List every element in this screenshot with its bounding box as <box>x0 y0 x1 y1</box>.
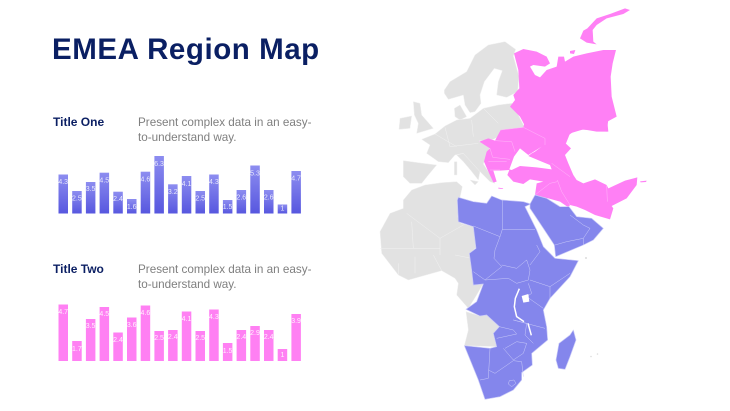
bar chart: title one: 2.6 <box>236 194 246 202</box>
bar chart: title one: 4.6 <box>141 176 150 184</box>
bar chart: title one: 4.3 <box>58 179 68 186</box>
map: grey West Africa <box>380 182 483 308</box>
text block: title one description: to-understand way. <box>138 131 237 144</box>
title: EMEA Region Map <box>52 33 320 66</box>
bar chart: title two <box>58 304 301 361</box>
bar chart: title two: 2.5 <box>195 335 205 342</box>
bar chart: title two: 4.1 <box>182 316 191 323</box>
text block: title two description <box>138 263 311 291</box>
map: pink Eastern Europe, Turkey and Middle East <box>479 120 647 219</box>
bar chart: title two: 2.5 <box>154 335 164 342</box>
text block: title two description: to-understand way. <box>138 278 237 291</box>
bar chart: title one: 3.2 <box>168 189 178 196</box>
bar chart: title one: 4.3 <box>209 179 219 186</box>
bar chart: title one: 2.4 <box>113 196 123 203</box>
bar chart: title two: 4.7 <box>58 309 68 316</box>
map: grey Europe <box>399 42 527 185</box>
map: small islands <box>585 257 598 357</box>
bar chart: title one: 4.7 <box>291 176 301 182</box>
map: Lake Victoria <box>522 294 529 303</box>
bar chart: title two: 1.5 <box>223 348 233 355</box>
heading: title two: Title Two <box>53 262 104 276</box>
bar chart: title two: 4.5 <box>99 311 109 318</box>
bar chart: title one: 1 <box>280 206 284 212</box>
bar chart: title one: 2.5 <box>195 196 205 202</box>
map: purple Africa and Arabia <box>457 195 603 399</box>
bar chart: title two: 1 <box>280 352 284 359</box>
bar chart: title one: 4.1 <box>182 181 191 188</box>
map: pink Russia <box>510 8 630 147</box>
map: Rift Valley lakes <box>514 289 531 335</box>
bar chart: title two: 3.5 <box>86 323 96 330</box>
map: Black Sea <box>509 147 552 170</box>
bar chart: title two: 2.4 <box>168 334 178 341</box>
bar chart: title one: 1.5 <box>223 204 233 211</box>
bar chart: title two: 4.3 <box>209 314 219 321</box>
bar chart: title two: 3.6 <box>127 322 137 329</box>
text block: title one description: Present complex data in an easy- <box>138 116 311 129</box>
map: Angola <box>464 312 499 347</box>
bar chart: title one: 5.3 <box>250 170 260 178</box>
bar chart: title two: 2.4 <box>236 334 246 341</box>
bar chart: title two: 2.4 <box>113 337 123 344</box>
bar chart: title one: 6.3 <box>154 161 164 168</box>
bar chart: title two: 2.4 <box>264 334 274 341</box>
bar chart: title one: 2.5 <box>72 196 82 202</box>
bar chart: title one <box>58 156 301 214</box>
heading: title one: Title One <box>53 115 104 129</box>
bar chart: title two: 4.6 <box>141 310 150 317</box>
bar chart: title one: 3.5 <box>86 186 96 193</box>
bar chart: title two: 3.9 <box>291 318 301 325</box>
text block: title one description <box>138 116 311 144</box>
text block: title two description: Present complex data in an easy- <box>138 263 311 276</box>
bar chart: title two: 1.7 <box>72 346 82 353</box>
bar chart: title two: 2.9 <box>250 330 260 337</box>
bar chart: title one: 4.5 <box>99 178 109 184</box>
bar chart: title one: 1.6 <box>127 204 137 211</box>
bar chart: title one: 2.6 <box>264 194 274 202</box>
